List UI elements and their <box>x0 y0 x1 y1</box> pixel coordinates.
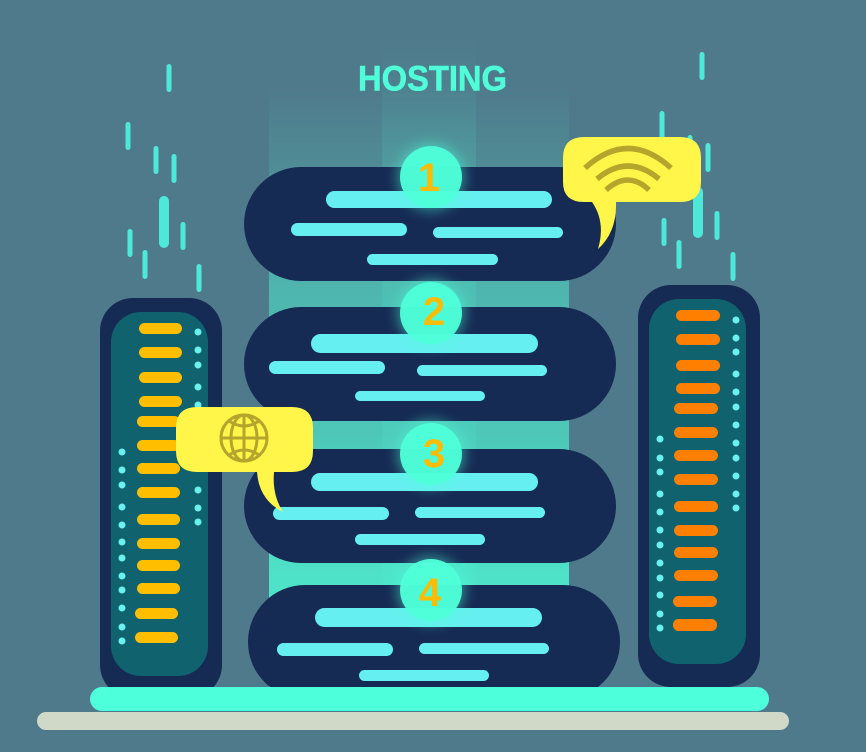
title: HOSTING <box>358 60 507 98</box>
server unit 4: 4 <box>419 571 442 615</box>
yellow indicator bars <box>135 323 182 643</box>
server tower: right <box>638 285 760 687</box>
server unit 1 <box>244 143 616 281</box>
server unit 3: 3 <box>423 432 445 476</box>
icon: wifi <box>585 148 671 190</box>
data rain: right <box>660 52 736 281</box>
status dots <box>656 316 740 632</box>
orange indicator bars <box>673 310 720 631</box>
server unit 3 <box>244 420 616 563</box>
light beams <box>269 35 569 695</box>
server tower: left <box>100 298 222 698</box>
speech bubble: wifi <box>563 137 701 249</box>
data rain: left <box>126 64 202 292</box>
icon: globe <box>221 415 267 461</box>
speech bubble: globe <box>176 407 313 512</box>
server unit 1: 1 <box>418 156 440 200</box>
server unit 2 <box>244 279 616 421</box>
status dots <box>118 328 202 644</box>
server unit 2: 2 <box>423 290 445 334</box>
ground strip <box>37 712 789 730</box>
server unit 4 <box>248 556 620 699</box>
platform base <box>90 687 769 711</box>
